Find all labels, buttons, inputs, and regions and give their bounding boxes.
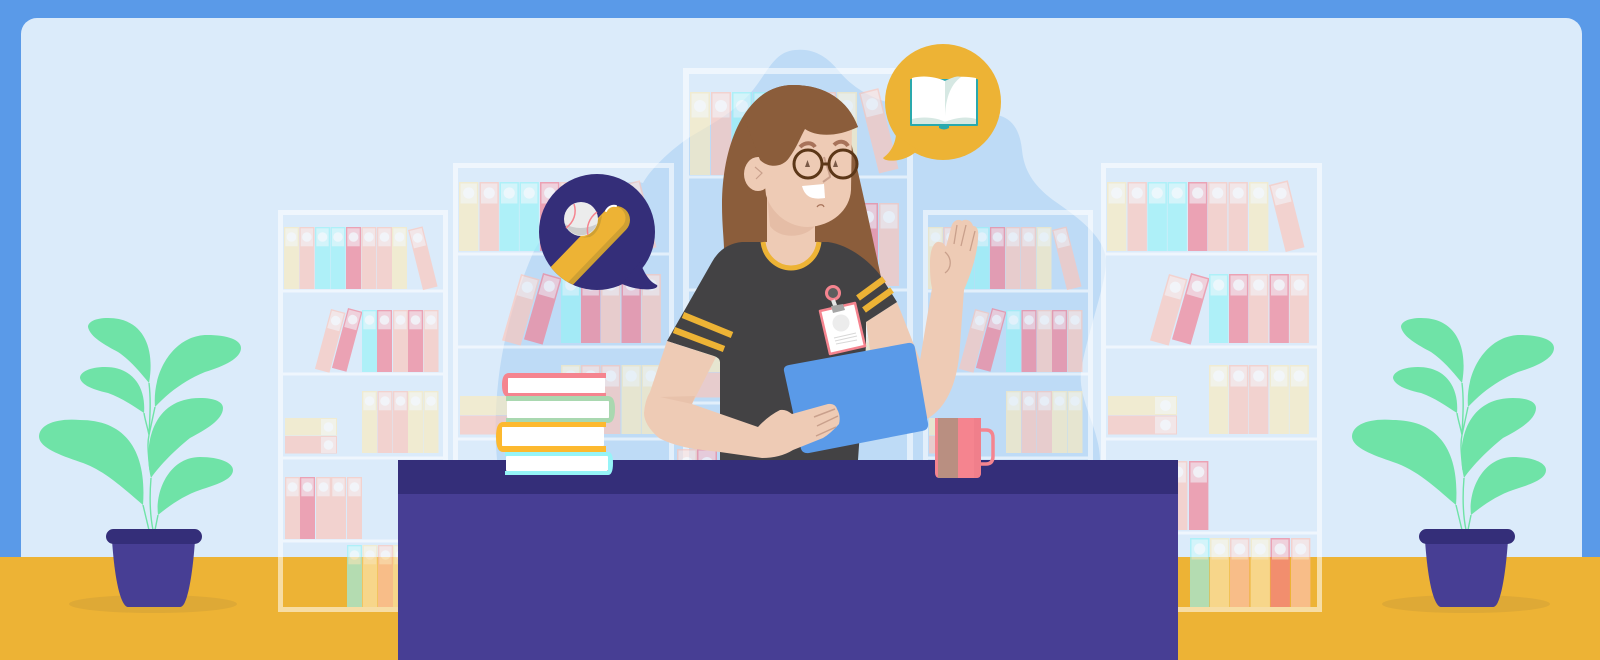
plant: left (39, 318, 241, 613)
stack of books (496, 373, 615, 475)
floor (0, 557, 1600, 660)
ear (744, 157, 772, 191)
raised arm and hand (866, 220, 978, 420)
hand fingers (814, 409, 838, 436)
bookshelf: right (1104, 166, 1320, 610)
fringe (745, 85, 858, 166)
pot body (1425, 540, 1508, 607)
pot rim (1419, 529, 1515, 544)
smile (802, 184, 825, 199)
coffee mug (935, 418, 993, 478)
leaves (39, 318, 241, 530)
pot shadow (69, 595, 237, 613)
pot rim (106, 529, 202, 544)
folded arm and hand (644, 341, 840, 458)
neck (767, 190, 815, 248)
collar (763, 242, 819, 268)
background blob (496, 50, 1106, 460)
pot body (112, 540, 195, 607)
bookshelf: centre-left (456, 166, 672, 610)
book green (506, 396, 615, 423)
character: librarian (644, 85, 978, 460)
t-shirt (667, 242, 897, 460)
eyebrows (800, 142, 848, 147)
plant: right (1352, 318, 1554, 613)
eyes (805, 160, 838, 167)
desk (398, 460, 1178, 660)
ear detail (755, 167, 762, 179)
bookshelf: left small (280, 212, 446, 610)
glasses (794, 150, 857, 178)
sleeve stripes (674, 279, 892, 349)
speech bubble: baseball and bat (539, 174, 658, 290)
arm crease (660, 396, 695, 404)
hair back (722, 85, 882, 282)
leaves (1352, 318, 1554, 530)
tablet (784, 343, 928, 453)
hand creases (945, 225, 975, 273)
id badge (820, 285, 865, 354)
nose (823, 157, 830, 182)
bookshelf: centre-right small (926, 212, 1090, 610)
face (762, 115, 852, 227)
speech bubble: open book (883, 44, 1001, 161)
neck shadow (767, 195, 815, 236)
pot shadow (1382, 595, 1550, 613)
book orange (496, 422, 606, 452)
book pink (502, 373, 606, 397)
lip (817, 205, 824, 207)
bookshelf: centre tall (677, 71, 910, 532)
book cyan (505, 452, 613, 475)
